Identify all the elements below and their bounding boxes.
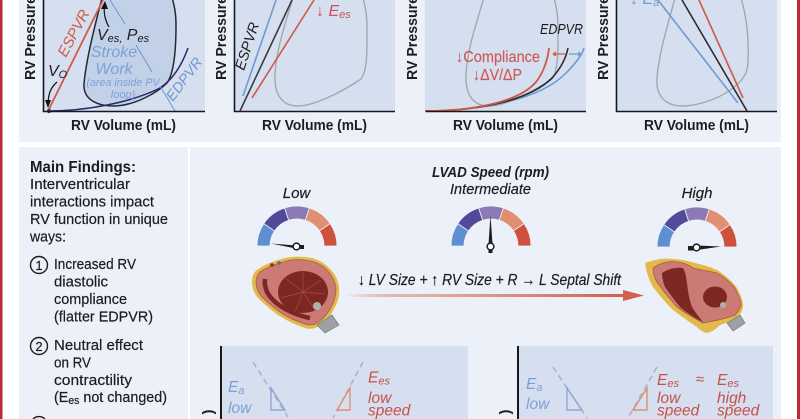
label: Ea low: a xyxy=(238,385,244,397)
finding 1: Increased RV xyxy=(54,256,136,273)
label: Ees high speed: speed xyxy=(717,402,761,419)
intro text: Interventricular xyxy=(30,176,130,193)
axis label: RV Volume (mL) xyxy=(262,117,367,134)
label: Ea low: low xyxy=(228,400,253,417)
intro text xyxy=(29,176,168,246)
label: Ees low speed: low xyxy=(657,390,682,407)
icon: heart at low speed xyxy=(252,257,339,333)
label: Ees low speed: speed xyxy=(657,402,701,419)
label: decreased Ees: ↓ E xyxy=(316,3,339,20)
label: Ea low xyxy=(526,376,551,413)
gauge: low speed: Low xyxy=(283,185,311,202)
label: Ees low speed xyxy=(368,370,412,419)
arrow: increasing speed xyxy=(345,290,644,301)
label: Ees low speed: es xyxy=(378,376,390,388)
chart: stroke work PV loop xyxy=(22,0,207,134)
label: stroke work: (area inside PV xyxy=(86,77,161,89)
chart: low vs high speed elastance xyxy=(497,346,773,419)
gauge: low speed xyxy=(257,185,337,250)
chart: ESPVR contractility xyxy=(213,0,395,134)
finding 2: contractility xyxy=(54,372,133,389)
label: Ves, Pes: V xyxy=(97,27,108,44)
finding 2: Neutral effect xyxy=(54,337,144,354)
finding 2 xyxy=(30,337,167,407)
gauge: intermediate speed xyxy=(450,181,531,253)
icon: heart at high speed xyxy=(645,259,745,333)
gauge: high speed xyxy=(657,185,737,251)
label: ESPVR: ESPVR xyxy=(55,7,93,60)
label: Ves, Pes: es xyxy=(137,33,150,45)
axis label: RV Volume (mL) xyxy=(71,117,176,134)
label: Ea low: E xyxy=(228,379,238,396)
label: Ees low speed: E xyxy=(657,372,667,389)
finding 1: (flatter EDPVR) xyxy=(54,308,153,326)
chart: low vs intermediate speed elastance xyxy=(200,346,468,419)
finding 2: 2 xyxy=(35,339,43,354)
label: Ees low speed: low xyxy=(368,390,393,407)
label: Ees high speed: es xyxy=(727,378,739,390)
label: Ves, Pes: es, xyxy=(108,33,122,45)
label: Ees low speed: E xyxy=(368,370,378,386)
label: Ea low xyxy=(228,379,253,417)
heading: Main Findings: xyxy=(30,159,136,176)
heading: LVAD speed: LVAD Speed (rpm) xyxy=(432,164,549,181)
label: decreased compliance xyxy=(456,49,540,84)
chart: EDPVR compliance xyxy=(404,0,586,134)
label: Ees low speed: es xyxy=(667,378,679,390)
chart: Ea arterial elastance xyxy=(595,0,777,134)
label: Ees high speed xyxy=(717,372,761,419)
axis label: RV Volume (mL) xyxy=(453,117,558,134)
panel: LVAD speed xyxy=(190,147,781,419)
axis label: ) xyxy=(200,410,217,414)
label: stroke work xyxy=(86,44,161,101)
label: V0: V xyxy=(48,63,59,80)
label: Ees low speed xyxy=(657,372,701,419)
gauge: high speed: High xyxy=(682,185,712,202)
panel: pressure-volume charts xyxy=(19,0,781,142)
label: decreased compliance: ↓Compliance xyxy=(456,49,540,66)
panel: main findings xyxy=(19,147,188,419)
label: Ea low: a xyxy=(536,382,542,394)
finding 1: diastolic xyxy=(54,274,108,290)
label: stroke work: loop) xyxy=(111,89,136,101)
finding 2: not changed) xyxy=(79,389,167,406)
finding 1 xyxy=(30,256,153,326)
label: stroke work: Work xyxy=(95,61,134,78)
intro text: ways: xyxy=(29,228,66,246)
finding 1: compliance xyxy=(54,291,127,308)
finding 3 marker xyxy=(33,417,45,419)
finding 2: (E xyxy=(54,389,69,406)
finding 1: 1 xyxy=(35,258,43,273)
label: Ees high speed: high xyxy=(717,390,746,407)
label: Ees low speed: speed xyxy=(368,402,412,419)
intro text: interactions impact xyxy=(30,194,155,210)
label: ESPVR: ESPVR xyxy=(233,20,263,72)
label: decreased Ees: es xyxy=(339,9,351,21)
label: V0: O xyxy=(59,69,68,81)
label: Ves, Pes: P xyxy=(122,27,138,44)
intro text: RV function in unique xyxy=(30,211,168,228)
label: decreased compliance: ↓ΔV/ΔP xyxy=(473,67,522,84)
label: approximately equal: ≈ xyxy=(696,371,704,388)
label: EDPVR: EDPVR xyxy=(540,22,583,38)
text: septal shift: ↓ LV Size + ↑ RV Size + R → L Septal Shift xyxy=(358,272,621,289)
label: Ea low: low xyxy=(526,396,551,413)
label: stroke work: Stroke xyxy=(91,44,137,61)
label: Ees high speed: E xyxy=(717,372,727,389)
finding 2: on RV xyxy=(54,354,91,372)
axis label: RV Volume (mL) xyxy=(644,117,749,134)
finding 2: es xyxy=(68,395,80,407)
label: Ea low: E xyxy=(526,376,536,393)
axis label: ) xyxy=(497,410,514,414)
gauge: intermediate speed: Intermediate xyxy=(450,181,531,198)
label: EDPVR: EDPVR xyxy=(163,54,207,104)
